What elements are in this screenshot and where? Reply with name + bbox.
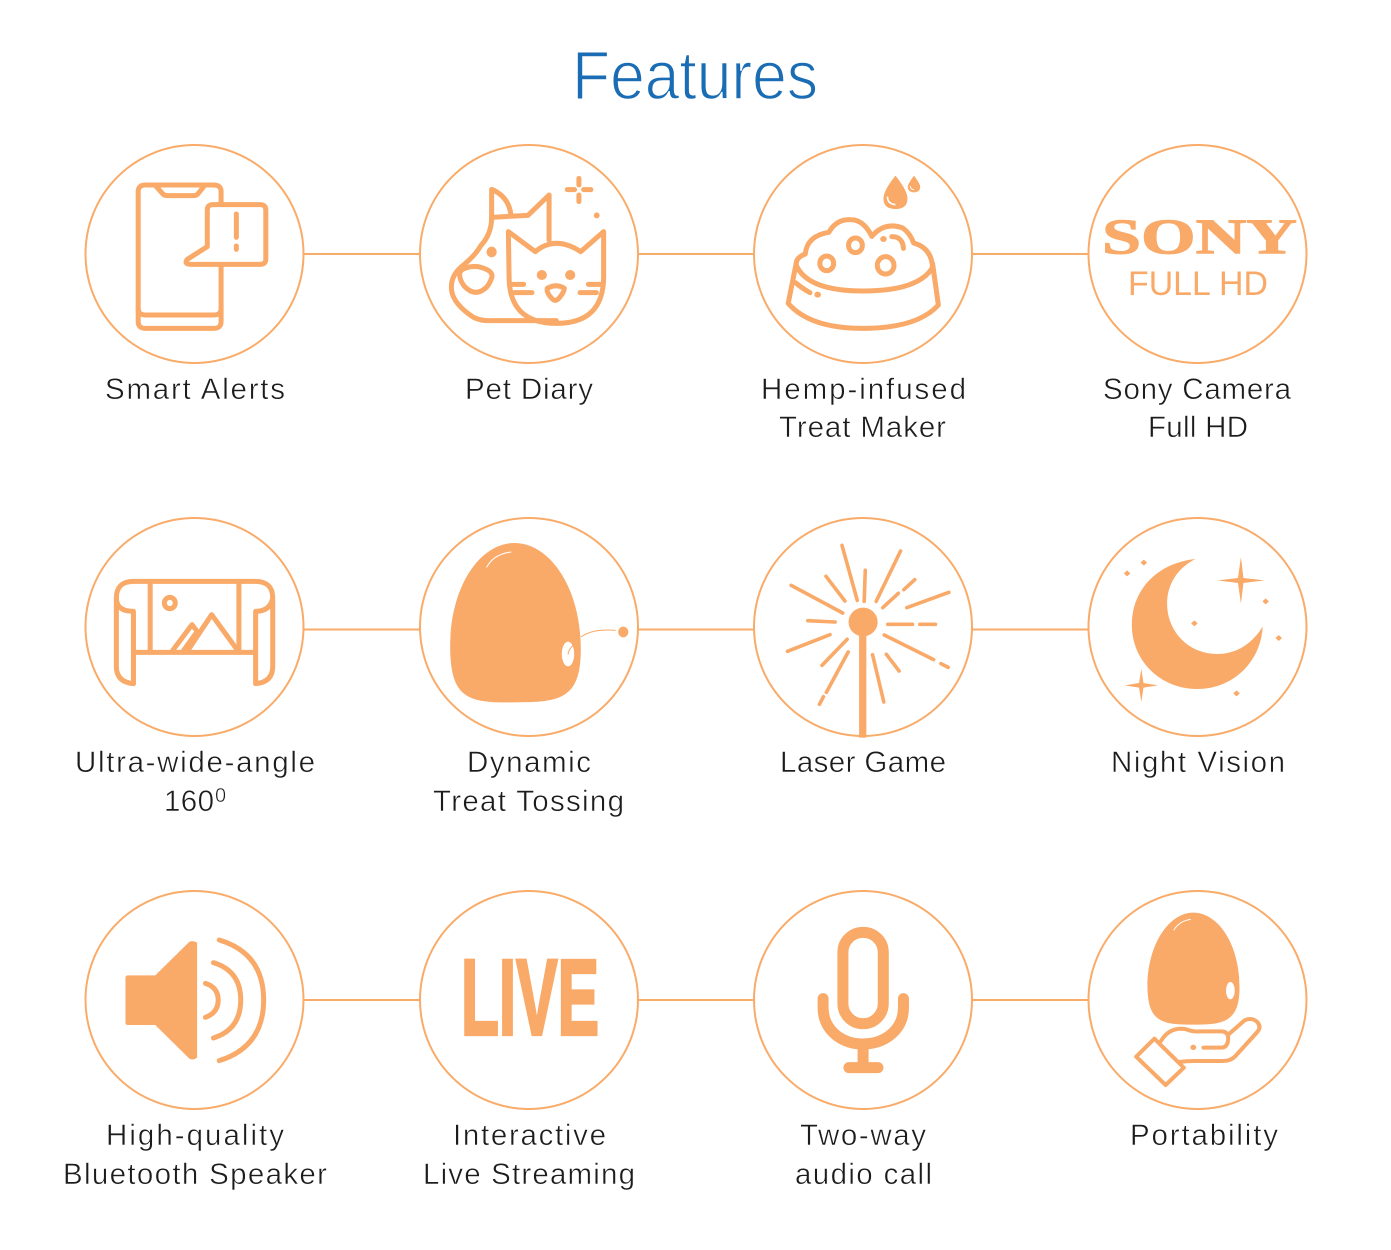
circle <box>1088 518 1306 736</box>
icon: LIVE wordmark: LIVE <box>461 936 599 1058</box>
feature: Interactive Live Streaming <box>420 891 638 1191</box>
feature: Pet Diary <box>420 145 638 406</box>
label: Bluetooth Speaker <box>63 1158 327 1191</box>
icon: Sony Full HD logo: FULL HD <box>1128 265 1268 303</box>
feature: Night Vision <box>1088 518 1306 779</box>
label: Sony Camera <box>1103 373 1292 406</box>
feature: Ultra-wide-angle <box>75 518 315 818</box>
feature: Smart Alerts <box>86 145 304 406</box>
circle <box>420 518 638 736</box>
circle <box>86 145 304 363</box>
label: Full HD <box>1148 411 1248 444</box>
title: Features <box>572 37 818 114</box>
feature: Portability <box>1088 891 1306 1152</box>
icon: speaker with sound waves <box>125 940 264 1061</box>
label: 0 <box>215 785 226 807</box>
feature: Hemp-infused Treat Maker <box>754 145 972 444</box>
icon: microphone <box>823 932 903 1068</box>
icon: treat bowl with drops <box>788 176 938 328</box>
feature: Dynamic Treat Tossing <box>420 518 638 818</box>
label: Night Vision <box>1111 746 1285 779</box>
label: Ultra-wide-angle <box>75 746 315 779</box>
circle <box>86 518 304 736</box>
connector lines: row 3 <box>303 999 1089 1001</box>
icon: cat and dog <box>451 178 604 323</box>
label: Interactive <box>453 1119 606 1152</box>
feature: Two-way audio call <box>754 891 972 1191</box>
label: Pet Diary <box>465 373 593 406</box>
icon: phone with alert bubble <box>138 185 266 328</box>
icon: hand holding egg device <box>1136 913 1259 1085</box>
connector lines: row 1 <box>303 253 1089 255</box>
label <box>761 373 966 444</box>
label <box>423 1119 635 1191</box>
circle <box>420 145 638 363</box>
feature: Bluetooth Speaker <box>63 891 327 1191</box>
circle <box>754 891 972 1109</box>
icon: laser burst <box>787 545 949 738</box>
feature: Sony Camera Full HD <box>1088 145 1306 444</box>
icon: egg-shaped device with laser dot <box>450 543 628 702</box>
label: 160 <box>164 785 214 818</box>
label: Two-way <box>800 1119 926 1152</box>
label: Treat Maker <box>779 411 946 444</box>
label: Smart Alerts <box>105 373 285 406</box>
label: Portability <box>1130 1119 1278 1152</box>
connector lines: row 2 <box>303 628 1089 630</box>
label <box>433 746 624 818</box>
label: Treat Tossing <box>433 785 624 818</box>
icon: Sony Full HD logo: SONY <box>1102 208 1297 264</box>
label: Live Streaming <box>423 1158 635 1191</box>
feature: Laser Game <box>754 518 972 779</box>
circle <box>754 518 972 736</box>
circle <box>1088 891 1306 1109</box>
label: audio call <box>795 1158 932 1191</box>
icon: wide-angle phone view <box>116 581 273 684</box>
circle <box>1088 145 1306 363</box>
label: Laser Game <box>780 746 946 779</box>
label <box>1103 373 1292 444</box>
label <box>75 746 315 818</box>
icon: Sony Full HD logo <box>1102 208 1297 303</box>
circle <box>754 145 972 363</box>
label <box>63 1119 327 1191</box>
label: Dynamic <box>467 746 591 779</box>
circle <box>420 891 638 1109</box>
label <box>795 1119 932 1191</box>
label: High-quality <box>106 1119 284 1152</box>
circle <box>86 891 304 1109</box>
label: Hemp-infused <box>761 373 966 406</box>
icon: crescent moon and stars <box>1124 557 1282 702</box>
